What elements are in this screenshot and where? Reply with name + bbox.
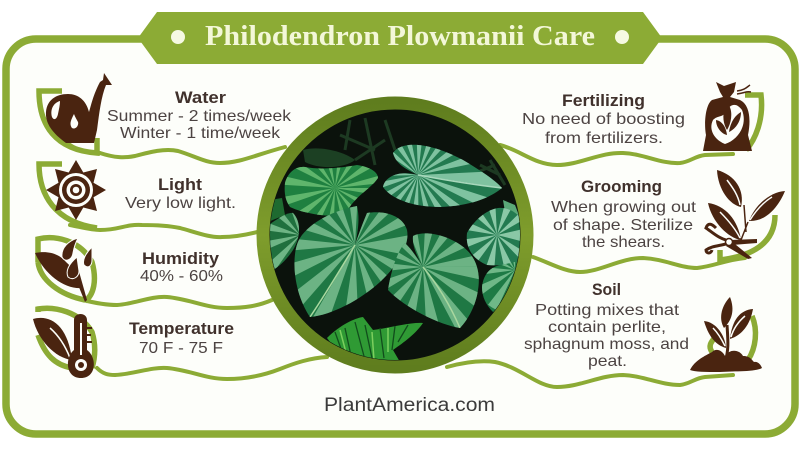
icon: sun bbox=[39, 160, 106, 228]
panel: grooming bbox=[551, 170, 785, 260]
panel: grooming: the shears. bbox=[582, 234, 665, 251]
text: temperature details: 70 F - 75 F bbox=[139, 340, 223, 357]
title banner bbox=[138, 12, 662, 64]
panel: fertilizing bbox=[522, 82, 762, 151]
title: Philodendron Plowmanii Care bbox=[205, 21, 595, 52]
panel: soil bbox=[524, 281, 762, 372]
icon: thermometer and leaf bbox=[33, 308, 95, 378]
leaf: right bbox=[466, 208, 520, 266]
icon: fertilizer sack bbox=[703, 82, 762, 151]
leaf: lower left bbox=[270, 212, 299, 269]
heading: grooming: Grooming bbox=[581, 178, 662, 196]
icon: watering can bbox=[39, 73, 112, 153]
leaf: big centre left bbox=[294, 206, 408, 317]
text: water details: Summer - 2 times/week bbox=[107, 108, 292, 125]
text: soil details: Potting mixes that bbox=[535, 302, 680, 319]
central plant photo bbox=[260, 103, 537, 367]
panel: water: Winter - 1 time/week bbox=[120, 125, 281, 142]
heading: water: Water bbox=[175, 89, 227, 107]
heading: soil: Soil bbox=[592, 281, 621, 299]
leaf: upper right bbox=[383, 144, 502, 207]
heading: fertilizing: Fertilizing bbox=[562, 92, 645, 110]
leaf: upper left bbox=[284, 165, 378, 216]
text: grooming details: When growing out bbox=[551, 199, 697, 216]
fern fronds bbox=[327, 317, 423, 362]
panel: temperature bbox=[33, 308, 234, 378]
text: light details: Very low light. bbox=[125, 195, 236, 212]
panel: grooming: of shape. Sterilize bbox=[553, 217, 693, 234]
panel: water bbox=[39, 73, 292, 153]
footer credit: PlantAmerica.com bbox=[324, 395, 495, 416]
wavy connector lines bbox=[70, 145, 745, 387]
panel: soil: peat. bbox=[588, 353, 627, 370]
panel: soil: contain perlite, bbox=[548, 319, 666, 336]
panel: fertilizing: from fertilizers. bbox=[545, 130, 663, 147]
dark foliage bbox=[303, 148, 355, 167]
icon: shears and leaves bbox=[706, 170, 785, 260]
leaf: lower centre right bbox=[385, 230, 481, 330]
icon: sprout in soil bbox=[690, 297, 762, 372]
panel: humidity bbox=[35, 238, 223, 302]
heading: light: Light bbox=[158, 176, 203, 194]
icon: humidity leaf and drops bbox=[35, 238, 94, 302]
leaf: lower right bbox=[482, 262, 518, 312]
heading: temperature: Temperature bbox=[129, 320, 234, 338]
heading: humidity: Humidity bbox=[142, 250, 220, 268]
panel: soil: sphagnum moss, and bbox=[524, 336, 689, 353]
text: fertilizing details: No need of boosting bbox=[522, 111, 685, 128]
text: humidity details: 40% - 60% bbox=[140, 268, 223, 285]
panel: light bbox=[39, 160, 236, 228]
